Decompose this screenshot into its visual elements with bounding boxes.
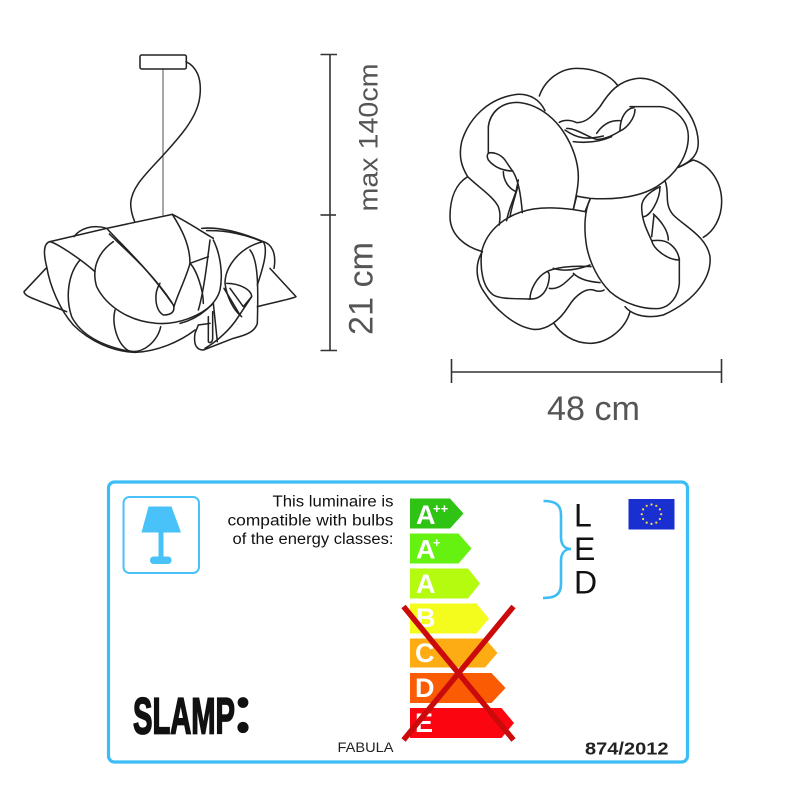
LED text	[574, 498, 597, 600]
class A+: A	[416, 534, 436, 564]
panel border	[108, 482, 688, 762]
height dimension line	[320, 54, 337, 351]
class C	[410, 638, 498, 668]
compatibility text: of the energy classes:	[232, 531, 394, 548]
class A	[410, 568, 480, 599]
label: 21 cm: 21 cm	[342, 242, 380, 335]
class A++: ++	[433, 501, 449, 516]
LED text: D	[574, 564, 597, 600]
product name: FABULA	[338, 739, 394, 755]
LED text: L	[574, 498, 592, 534]
panel: energy label	[108, 482, 688, 762]
label: 48 cm: 48 cm	[547, 390, 640, 428]
class E: E	[415, 708, 433, 738]
red cross over excluded classes	[404, 606, 514, 740]
class A+	[410, 534, 472, 564]
energy class arrows	[410, 498, 514, 738]
compatibility text	[228, 494, 394, 548]
class A++	[410, 498, 464, 530]
regulation number: 874/2012	[585, 738, 669, 758]
class B	[410, 603, 489, 634]
compatibility text: This luminaire is	[272, 494, 394, 510]
class D: D	[415, 673, 434, 703]
class B: B	[416, 603, 436, 633]
class D	[410, 673, 506, 703]
icon: table lamp	[124, 497, 199, 573]
brace	[543, 501, 571, 598]
logo: SLAMP: SLAMP	[133, 688, 235, 744]
logo: SLAMP	[133, 688, 249, 744]
LED text: E	[574, 531, 595, 567]
top view drawing of lamp	[450, 68, 722, 343]
class A++: A	[416, 500, 436, 530]
class C: C	[415, 638, 434, 668]
side view drawing of pendant lamp	[24, 55, 296, 352]
width dimension line	[451, 359, 722, 383]
class E	[410, 708, 514, 738]
compatibility text: compatible with bulbs	[228, 512, 394, 530]
icon: EU flag	[628, 499, 674, 530]
class A: A	[416, 569, 436, 599]
label: max 140cm: max 140cm	[354, 64, 384, 212]
class A+: +	[433, 535, 441, 550]
